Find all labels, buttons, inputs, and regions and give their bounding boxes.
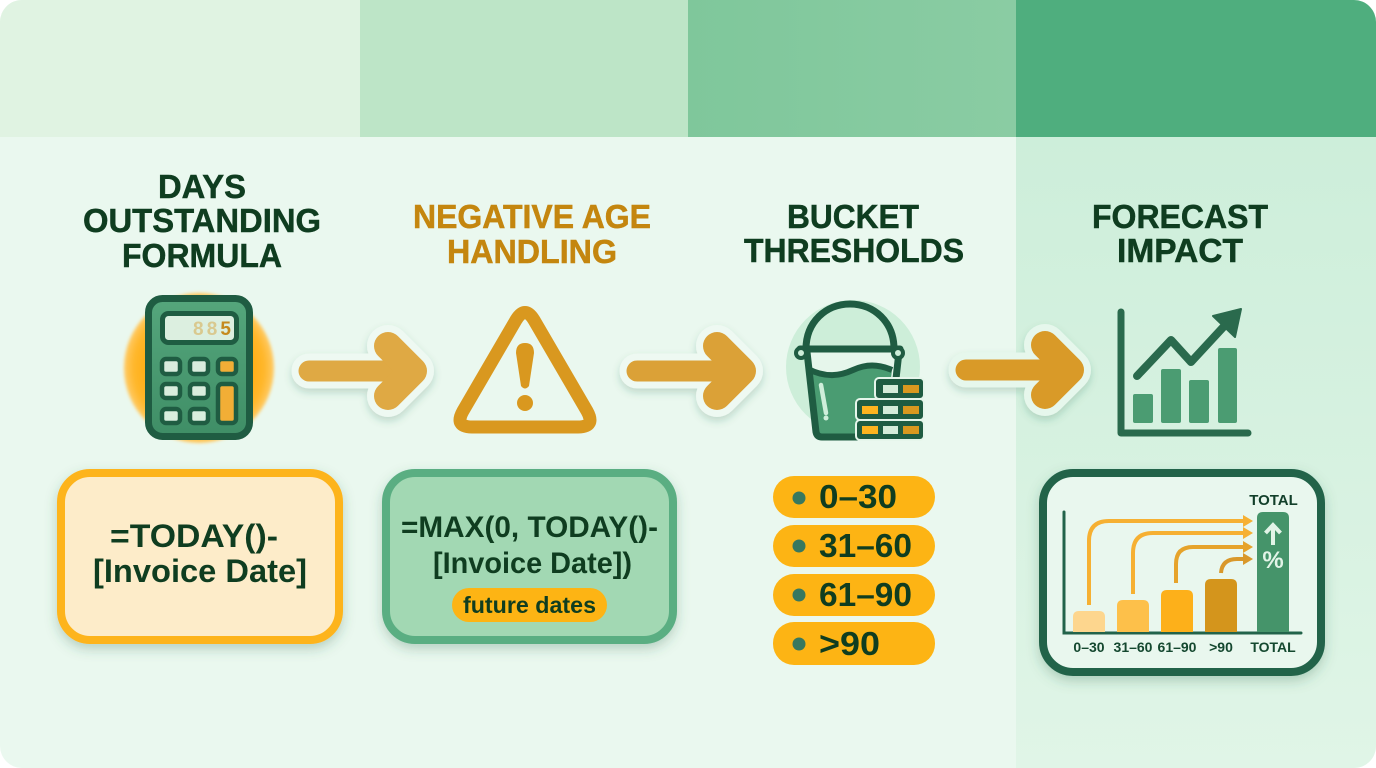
pill: 0-30 <box>773 476 935 518</box>
formula box: today minus invoice date: =TODAY()- <box>110 518 278 554</box>
tag: future dates: future dates <box>463 592 596 618</box>
formula box: max zero today minus invoice date <box>386 473 673 640</box>
heading: forecast impact <box>1094 204 1268 262</box>
panel: days outstanding formula <box>61 168 339 640</box>
heading: days outstanding formula: FORMULA <box>122 237 282 274</box>
heading: bucket thresholds: BUCKET <box>787 198 919 235</box>
heading: days outstanding formula: DAYS <box>158 168 246 205</box>
panel: forecast impact <box>1043 198 1321 672</box>
pill: over 90: >90 <box>819 625 880 662</box>
heading: days outstanding formula: OUTSTANDING <box>83 202 321 239</box>
chart card: buckets flowing to total <box>1043 473 1321 672</box>
arrow: step 1 to step 2 <box>309 346 413 396</box>
list: threshold pills <box>773 476 935 665</box>
chart axis labels <box>1074 642 1296 652</box>
tag: future dates <box>452 588 607 622</box>
icon: calculator: 885 <box>193 319 231 340</box>
formula box: max zero today minus invoice date: [Invoice Date]) <box>433 547 632 580</box>
panel: negative age handling <box>386 198 673 640</box>
pill: 31-60: 31–60 <box>819 527 912 564</box>
heading: negative age handling: HANDLING <box>447 233 617 270</box>
formula box: max zero today minus invoice date: =MAX(0, TODAY()- <box>401 511 658 544</box>
icon: calculator <box>124 293 274 443</box>
label: total top: TOTAL <box>1249 492 1298 509</box>
icon: bucket with stacked bars <box>786 300 924 440</box>
arrow: step 2 to step 3 <box>637 346 742 396</box>
heading: forecast impact: FORECAST <box>1092 198 1268 235</box>
bars <box>1073 512 1289 632</box>
chart axis labels: >90 <box>1209 639 1233 655</box>
chart axis labels: 61–90 <box>1158 639 1197 655</box>
pill: 61-90 <box>773 574 935 616</box>
header colour bands <box>0 0 1376 137</box>
panel: bucket thresholds <box>744 198 964 665</box>
heading: negative age handling: NEGATIVE AGE <box>413 198 651 235</box>
total bar up arrow and percent <box>1262 525 1284 574</box>
pill: 61-90: 61–90 <box>819 576 912 613</box>
chart axis labels: TOTAL <box>1250 639 1296 655</box>
pill: over 90 <box>773 622 935 665</box>
arrow: step 3 to step 4 <box>966 345 1070 395</box>
icon: rising chart <box>1121 309 1248 433</box>
heading: negative age handling <box>414 204 650 264</box>
heading: bucket thresholds: THRESHOLDS <box>744 232 964 269</box>
chart axis labels: 0–30 <box>1073 639 1105 655</box>
pill: 0-30: 0–30 <box>819 478 897 515</box>
total bar up arrow and percent: % <box>1262 547 1284 574</box>
formula box: today minus invoice date <box>61 473 339 640</box>
heading: days outstanding formula <box>84 174 320 268</box>
formula box: today minus invoice date: [Invoice Date] <box>93 553 307 589</box>
heading: forecast impact: IMPACT <box>1117 232 1243 269</box>
chart axes <box>1064 512 1301 633</box>
flow arrows into total <box>1089 515 1253 605</box>
pill: 31-60 <box>773 525 935 567</box>
chart axis labels: 31–60 <box>1114 639 1153 655</box>
heading: bucket thresholds <box>744 204 964 262</box>
icon: warning triangle <box>460 312 590 427</box>
